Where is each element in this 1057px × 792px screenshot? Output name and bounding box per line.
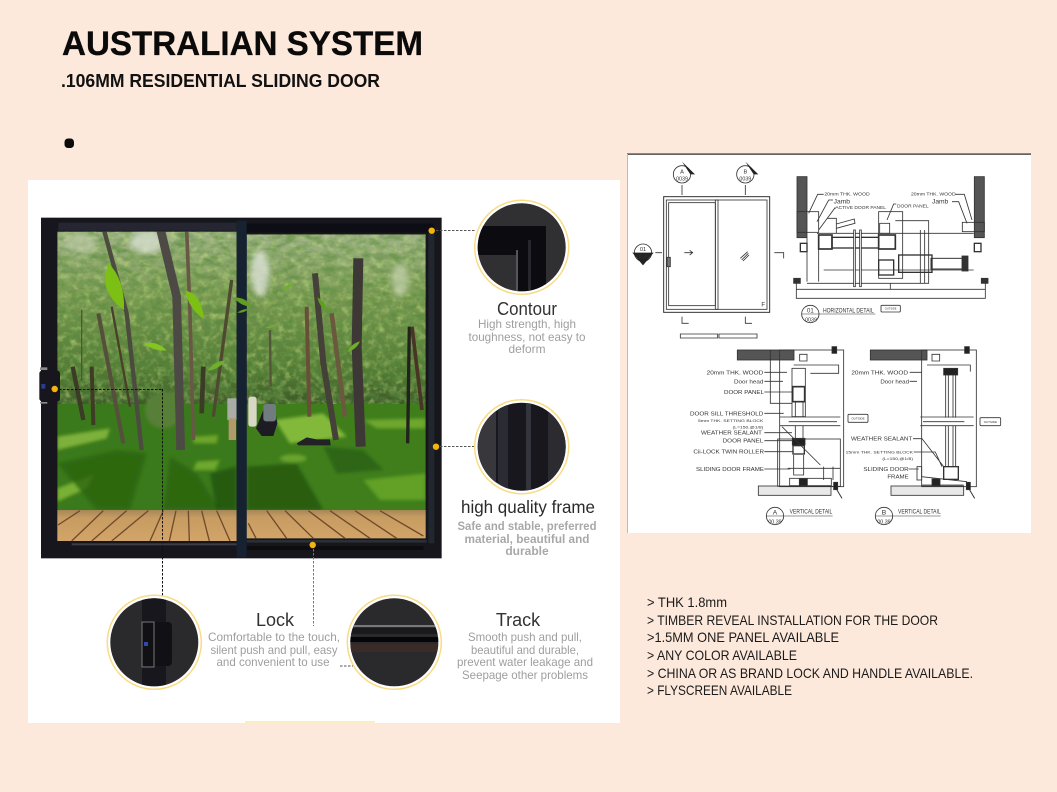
horizontal detail drawing: 0039 bbox=[805, 317, 817, 323]
door lock handle bbox=[39, 367, 60, 404]
elevation drawing: F bbox=[761, 303, 765, 309]
text: lock description: and convenient to use bbox=[216, 655, 330, 669]
elevation drawing: A bbox=[680, 169, 684, 175]
icon: contour detail circle bbox=[470, 200, 569, 300]
vertical detail B drawing: B bbox=[882, 509, 887, 516]
horizontal detail drawing: 20mm THK. WOOD bbox=[824, 192, 870, 197]
elevation drawing: B bbox=[743, 169, 747, 175]
elevation drawing: 01 bbox=[640, 247, 646, 253]
text: track description: beautiful and durable, bbox=[471, 643, 579, 657]
elevation drawing bbox=[632, 162, 784, 338]
heading: lock: Lock bbox=[256, 610, 295, 630]
specification list: > THK 1.8mm bbox=[647, 594, 727, 610]
detail title A bbox=[766, 507, 784, 525]
specification list: > ANY COLOR AVAILABLE bbox=[647, 647, 797, 663]
specification list: > CHINA OR AS BRAND LOCK AND HANDLE AVAILABLE. bbox=[647, 665, 973, 681]
vertical detail A drawing: 5mm THK. SETTING BLOCK bbox=[698, 418, 764, 423]
heading: high quality frame: high quality frame bbox=[461, 497, 595, 517]
text: contour description: High strength, high bbox=[478, 317, 576, 331]
vertical detail B drawing: 15mm THK. SETTING BLOCK bbox=[846, 449, 913, 454]
vertical detail A drawing: 20mm THK. WOOD bbox=[707, 370, 763, 376]
detail title 01 bbox=[802, 305, 819, 323]
drawing panel background bbox=[628, 154, 1031, 533]
text: frame description: Safe and stable, preferred bbox=[458, 519, 596, 533]
vertical detail B drawing: VERTICAL DETAIL bbox=[898, 509, 941, 516]
section markers bbox=[634, 166, 754, 261]
vertical detail A drawing: A bbox=[773, 509, 778, 516]
text: frame description bbox=[458, 519, 596, 558]
heading: track: Track bbox=[496, 610, 541, 630]
vertical detail A drawing: 00.39 bbox=[768, 519, 782, 525]
vertical detail A drawing: DOOR PANEL bbox=[724, 390, 764, 396]
elevation drawing: 0039 bbox=[739, 177, 751, 183]
icon: frame detail circle bbox=[475, 400, 569, 495]
vertical detail A drawing: VERTICAL DETAIL bbox=[790, 509, 833, 516]
panel background bbox=[28, 180, 620, 723]
horizontal detail drawing: HORIZONTAL DETAIL bbox=[823, 308, 874, 315]
callout: lock bbox=[107, 595, 340, 690]
heading: contour: Contour bbox=[497, 299, 557, 319]
bullet bbox=[64, 138, 74, 148]
specification list: >1.5MM ONE PANEL AVAILABLE bbox=[647, 629, 839, 645]
specification list bbox=[647, 594, 973, 698]
horizontal detail drawing: 20mm THK. WOOD bbox=[911, 192, 956, 197]
text: lock description: Comfortable to the touch, bbox=[208, 630, 340, 644]
title: AUSTRALIAN SYSTEM bbox=[62, 25, 423, 63]
callout: track bbox=[347, 595, 593, 689]
horizontal detail drawing: DOOR PANEL bbox=[897, 203, 929, 208]
horizontal detail drawing: Jamb bbox=[932, 198, 949, 205]
vertical detail B drawing: OUTSIDE bbox=[984, 420, 997, 424]
elevation drawing: 0039 bbox=[637, 254, 649, 260]
mullion over scene bbox=[237, 221, 247, 557]
icon: lock detail circle bbox=[107, 595, 201, 690]
vertical detail A drawing: Door head bbox=[734, 379, 763, 385]
vertical detail A drawing: (L=150,@1/8) bbox=[733, 425, 764, 430]
panel: product photo with feature callouts bbox=[28, 180, 620, 723]
text: frame description: material, beautiful and bbox=[464, 532, 590, 546]
vertical detail A drawing: SLIDING DOOR FRAME bbox=[696, 467, 764, 473]
callout leader lines bbox=[55, 230, 476, 666]
callout: high quality frame bbox=[458, 400, 596, 558]
elevation drawing: 0039 bbox=[676, 177, 688, 183]
text: lock description bbox=[208, 630, 340, 669]
horizontal detail drawing: Jamb bbox=[834, 198, 850, 205]
faint yellow strip bbox=[245, 721, 375, 723]
vertical detail A drawing: Cii-LOCK TWIN ROLLER bbox=[693, 450, 764, 456]
text: contour description: toughness, not easy to bbox=[468, 330, 586, 344]
callout: contour bbox=[468, 200, 586, 356]
subtitle: .106MM RESIDENTIAL SLIDING DOOR bbox=[61, 70, 380, 91]
panel: technical drawings bbox=[627, 154, 1031, 533]
specification list: > FLYSCREEN AVAILABLE bbox=[647, 682, 792, 698]
vertical detail B drawing: 00.39 bbox=[877, 519, 891, 525]
vertical detail A drawing: DOOR SILL THRESHOLD bbox=[690, 411, 763, 417]
specification list: > TIMBER REVEAL INSTALLATION FOR THE DOOR bbox=[647, 612, 938, 628]
vertical detail B drawing: SLIDING DOOR bbox=[863, 467, 909, 473]
left glass scene bbox=[57, 232, 237, 510]
vertical detail B drawing: 20mm THK. WOOD bbox=[851, 370, 908, 376]
callout marker dots bbox=[52, 228, 439, 548]
icon: track detail circle bbox=[347, 595, 441, 689]
vertical detail B drawing bbox=[846, 347, 1001, 525]
horizontal detail drawing: 01 bbox=[807, 308, 814, 314]
horizontal detail drawing: ACTIVE DOOR PANEL bbox=[835, 205, 886, 210]
horizontal detail drawing bbox=[794, 177, 988, 323]
text: track description: prevent water leakage and bbox=[457, 655, 593, 669]
floating leaves bbox=[105, 263, 360, 371]
sliding door photo bbox=[39, 218, 442, 558]
text: lock description: silent push and pull, easy bbox=[210, 643, 338, 657]
right glass scene bbox=[247, 234, 426, 538]
vertical detail A drawing bbox=[690, 347, 868, 525]
detail title B bbox=[875, 507, 893, 525]
door frame bbox=[41, 218, 442, 558]
vertical detail A drawing: OUTSIDE bbox=[851, 417, 865, 421]
vertical detail B drawing: FRAME bbox=[887, 475, 909, 481]
text: track description bbox=[457, 630, 593, 682]
vertical detail A drawing: WEATHER SEALANT bbox=[701, 431, 763, 437]
text: track description: Seepage other problems bbox=[462, 668, 588, 682]
vertical detail A drawing: DOOR PANEL bbox=[723, 439, 763, 445]
wooden deck bbox=[57, 510, 426, 541]
vertical detail B drawing: (L=150,@1/8) bbox=[882, 456, 914, 461]
people and bags bbox=[248, 397, 257, 427]
text: track description: Smooth push and pull, bbox=[468, 630, 582, 644]
vertical detail B drawing: WEATHER SEALANT bbox=[851, 437, 913, 443]
vertical detail B drawing: Door head bbox=[880, 379, 909, 385]
text: frame description: durable bbox=[505, 544, 549, 558]
horizontal detail drawing: OUTSIDE bbox=[885, 307, 897, 311]
text: contour description: deform bbox=[508, 342, 546, 356]
text: contour description bbox=[468, 317, 586, 356]
